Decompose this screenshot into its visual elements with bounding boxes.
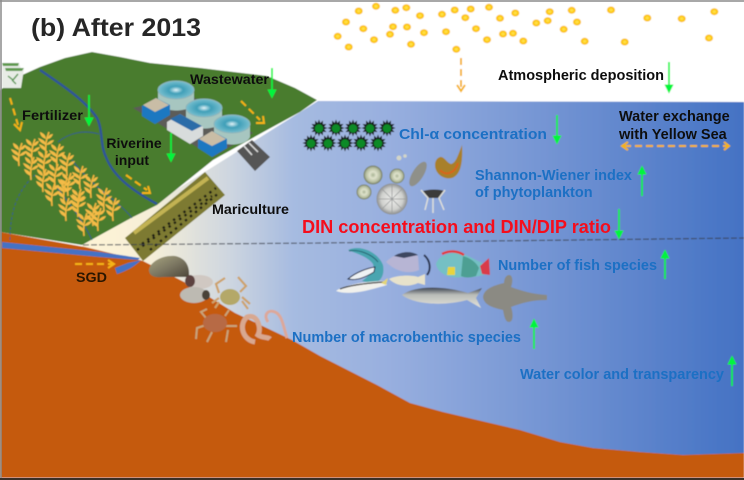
fish: tuna <box>386 252 419 272</box>
icons: atmospheric particles <box>334 3 718 53</box>
label: Water exchange with Yellow Sea: Water exchange <box>619 109 730 125</box>
shellfish: clams <box>180 275 213 303</box>
label: Fertilizer: Fertilizer <box>22 107 84 123</box>
label: Mariculture: Mariculture <box>212 201 289 217</box>
icon: fertilizer bags <box>2 63 24 88</box>
shellfish: mussel <box>149 256 189 277</box>
text labels <box>22 14 730 383</box>
arrow: atmospheric deposition down <box>668 62 670 89</box>
arrow: fish species up <box>664 254 666 279</box>
label: Wastewater: Wastewater <box>190 71 270 87</box>
crab: pale crab <box>212 277 250 309</box>
fish: dark-backed sardine <box>348 267 375 280</box>
river <box>40 70 157 204</box>
bottom edge <box>0 478 744 480</box>
arrow: SGD flow <box>75 260 114 268</box>
label: Shannon-Wiener index of phytoplankton: of phytoplankton <box>475 185 593 201</box>
title: (b) After 2013 <box>31 14 201 42</box>
label: Number of macrobenthic species: Number of macrobenthic species <box>292 330 521 346</box>
label: Water color and transparency: Water color and transparency <box>520 367 724 383</box>
label: Riverine input: Riverine <box>106 135 162 151</box>
arrow: wastewater discharge <box>241 101 264 123</box>
fish: herring <box>402 288 482 308</box>
label: Number of fish species: Number of fish species <box>498 258 657 274</box>
icons: fish <box>336 248 547 322</box>
fish: salmon <box>348 248 383 283</box>
arrow: riverine input down <box>170 133 172 158</box>
icon: wastewater treatment plant <box>133 81 253 157</box>
fish: colourful reef fish <box>436 251 490 278</box>
arrows: orange dashed flux arrows <box>10 58 729 268</box>
icons: macrobenthos <box>149 256 287 342</box>
field boundary lines <box>10 132 132 240</box>
arrow: water color up <box>731 360 733 386</box>
arrow: DIN down <box>618 209 620 235</box>
arrow: fertilizer runoff <box>10 98 22 130</box>
fish: anchovy <box>336 278 388 293</box>
arrow: fertilizer down <box>88 95 90 122</box>
icon: wheat field <box>11 132 121 236</box>
arrow: wastewater down <box>271 68 273 94</box>
fish: pale small fish <box>389 274 425 286</box>
fish: crescent tail <box>424 255 430 275</box>
seabed: orange sediment <box>0 232 744 478</box>
label: Chl-a concentration: Chl-α concentration <box>399 126 547 143</box>
label: Shannon-Wiener index of phytoplankton: Shannon-Wiener index <box>475 168 632 184</box>
arrows: green trend arrows <box>89 62 732 386</box>
arrow: macrobenthic species up <box>533 323 535 349</box>
label: Riverine input: input <box>115 152 149 168</box>
fish: flat ray <box>483 275 547 322</box>
icon: mariculture raft <box>125 172 225 261</box>
icons: chlorophyll cells <box>302 120 396 152</box>
arrow: water exchange <box>622 142 729 150</box>
label: SGD: SGD <box>76 269 107 285</box>
water level dashed line <box>83 238 744 245</box>
wastewater outfall <box>237 140 270 171</box>
label: DIN concentration and DIN/DIP ratio: DIN concentration and DIN/DIP ratio <box>302 217 611 237</box>
arrow: Shannon-Wiener up <box>641 170 643 196</box>
groundwater flow: SGD channel <box>2 242 141 274</box>
icons: phytoplankton <box>356 145 462 214</box>
crab: red crab <box>196 309 237 342</box>
worms <box>242 311 287 342</box>
arrow: atmospheric deposition <box>457 58 465 91</box>
label: Atmospheric deposition: Atmospheric deposition <box>498 68 664 84</box>
label: Water exchange with Yellow Sea: with Yellow Sea <box>618 127 728 143</box>
arrow: river flow <box>126 175 150 193</box>
arrow: Chl-a down <box>556 115 558 140</box>
sea water gradient <box>82 101 744 465</box>
land: green coast <box>0 52 317 245</box>
